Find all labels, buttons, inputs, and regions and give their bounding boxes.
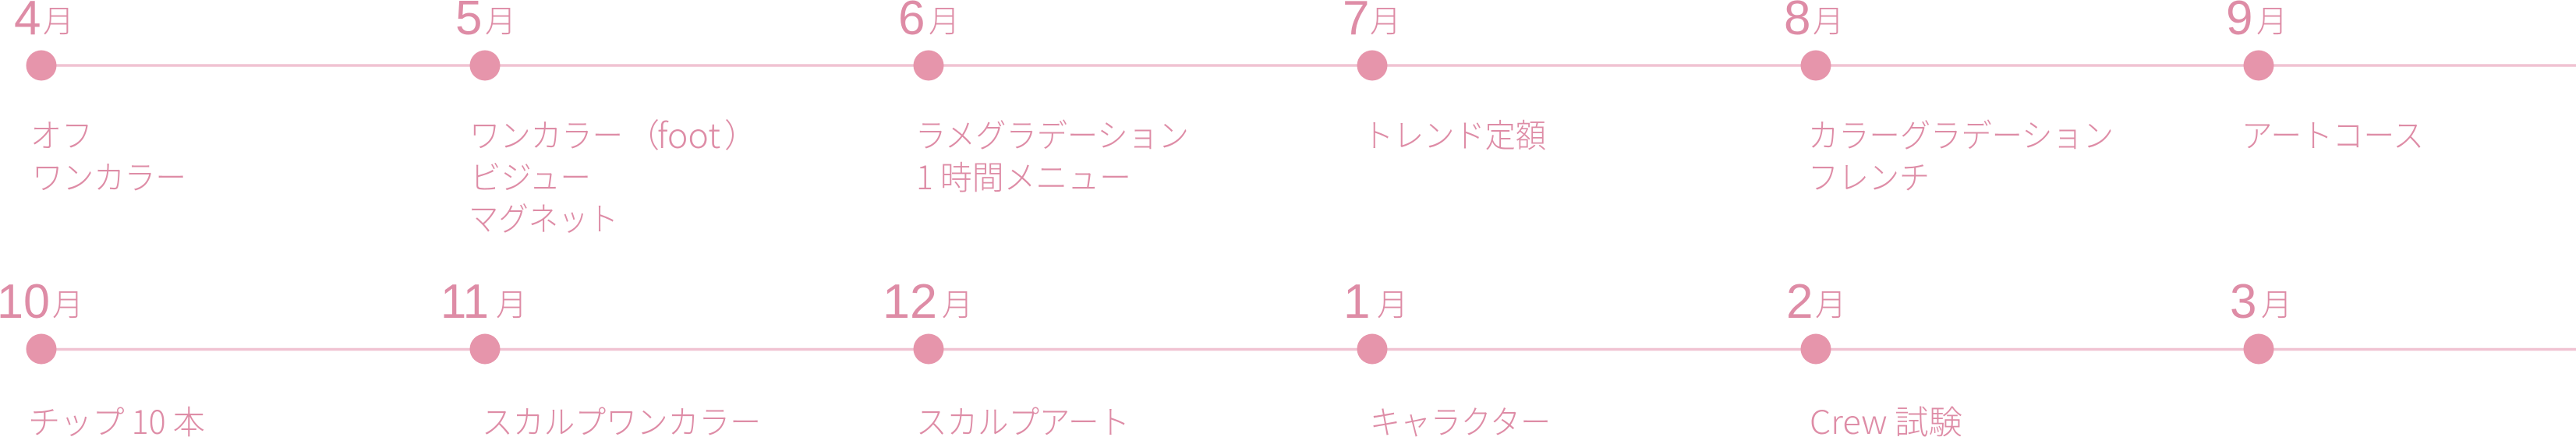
month label: January: 1 [1343, 275, 1370, 329]
dot: February [1801, 333, 1831, 365]
timeline line: October to March [41, 348, 2576, 351]
menu text: August [1808, 110, 2114, 199]
dot: June [914, 50, 943, 81]
month label: January [1343, 275, 1408, 329]
month label: October: 月 [52, 280, 83, 325]
dot: December [914, 333, 943, 365]
panel: January [1343, 275, 1551, 437]
menu text: April [30, 110, 186, 199]
panel: September [2226, 0, 2424, 157]
panel: December [883, 275, 1130, 437]
dot: September [2244, 50, 2273, 81]
month label: March [2230, 275, 2292, 329]
menu text: September: アートコース [2242, 110, 2424, 157]
menu text: June [915, 110, 1189, 199]
menu text: June: ラメグラデーション [915, 110, 1189, 157]
menu text: May [469, 108, 757, 241]
month label: November: 月 [496, 280, 527, 325]
panel: May [455, 0, 757, 241]
panel: July [1343, 0, 1546, 157]
menu text: July: トレンド定額 [1363, 110, 1546, 157]
menu text: April: オフ [30, 110, 93, 157]
panel: November [441, 275, 761, 437]
menu text: June: 1 時間メニュー [916, 152, 1131, 199]
month label: September [2226, 0, 2288, 45]
month label: February: 月 [1815, 280, 1846, 325]
dot: August [1801, 50, 1831, 81]
panel: March [2230, 275, 2292, 365]
month label: October [0, 275, 83, 329]
menu text: May: ワンカラー [469, 110, 623, 157]
panel: April [14, 0, 186, 199]
dot: November [469, 333, 501, 365]
month label: December [883, 275, 973, 329]
menu text: May: ビジュー [470, 152, 591, 199]
month label: May [455, 0, 516, 45]
month label: August [1784, 0, 1844, 45]
dot: April [27, 50, 56, 81]
month label: March: 月 [2261, 280, 2292, 325]
month label: December: 12 [883, 275, 937, 329]
dot: July [1357, 50, 1388, 81]
dot: October [27, 333, 56, 365]
panel: October [0, 275, 205, 437]
menu text: May: foot [657, 108, 720, 158]
menu text: August: フレンチ [1808, 152, 1930, 199]
month label: January: 月 [1377, 280, 1408, 325]
menu text: May: （ [627, 110, 660, 157]
month label: July [1343, 0, 1401, 45]
menu text: May: ） [724, 110, 757, 157]
month label: February: 2 [1786, 275, 1813, 329]
menu text: April: ワンカラー [32, 152, 186, 199]
menu text: May: マグネット [469, 193, 618, 241]
month label: February [1786, 275, 1846, 329]
month label: March: 3 [2230, 275, 2256, 329]
month label: December: 月 [942, 280, 973, 325]
panel: June [898, 0, 1189, 199]
month label: November: 11 [441, 275, 489, 329]
timeline line: April to September [41, 64, 2576, 67]
month label: November [441, 275, 527, 329]
dot: January [1357, 333, 1388, 365]
month label: April [14, 0, 74, 45]
dot: May [469, 50, 501, 81]
panel: February [1786, 275, 1962, 437]
month label: June [898, 0, 960, 45]
panel: August [1784, 0, 2114, 199]
dot: March [2244, 333, 2273, 365]
menu text: August: カラーグラデーション [1808, 110, 2114, 157]
